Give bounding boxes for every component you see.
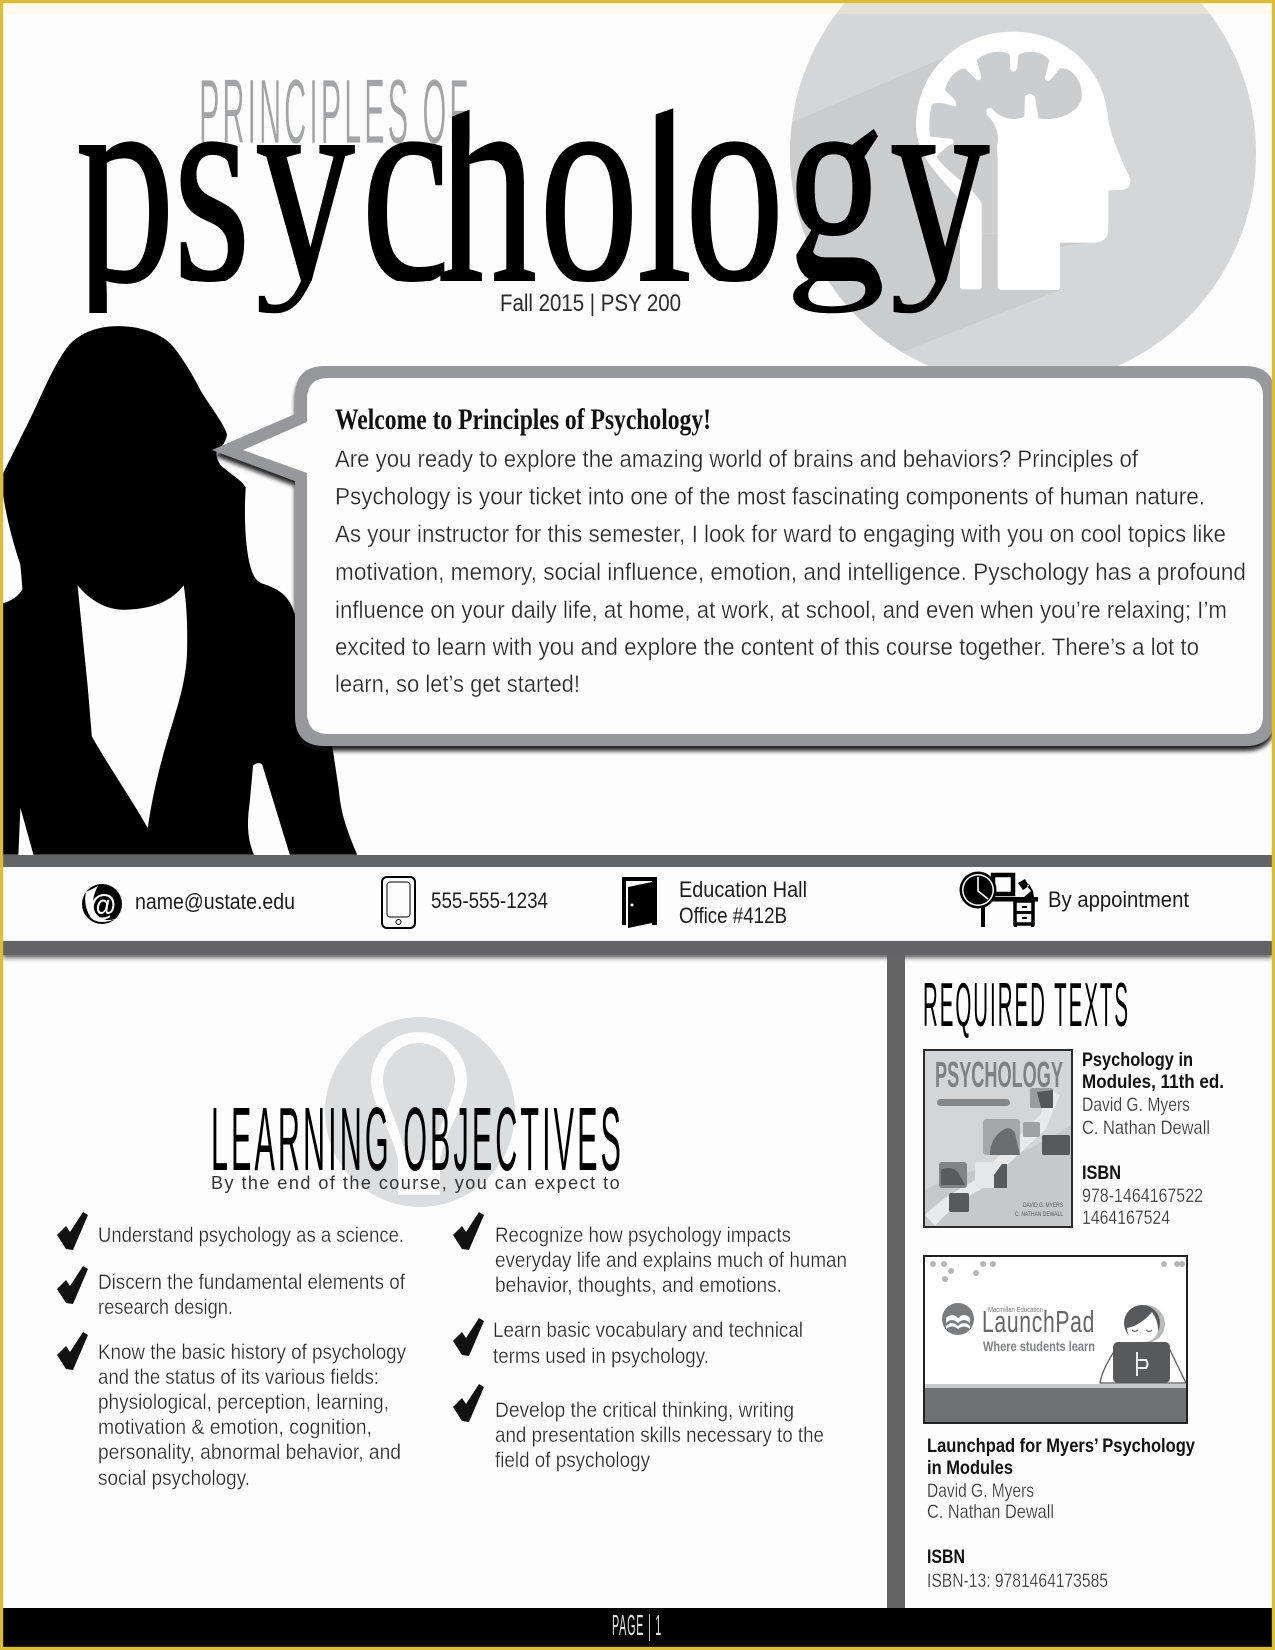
book details: 1464167524 bbox=[1082, 1207, 1170, 1229]
objective 6: Develop the critical thinking, writing bbox=[495, 1398, 794, 1422]
contact: office hours bbox=[960, 872, 1189, 927]
launchpad image: Macmillan Education bbox=[988, 1307, 1043, 1314]
icon: clock and desk bbox=[960, 872, 1038, 927]
objective 3 bbox=[57, 1332, 406, 1490]
contact: email bbox=[82, 884, 295, 924]
book cover: psychology in modules: DAVID G. MYERS bbox=[1023, 1203, 1063, 1209]
book cover: psychology in modules: C. NATHAN DEWALL bbox=[1015, 1212, 1064, 1218]
book details bbox=[1082, 1049, 1224, 1229]
launchpad details: David G. Myers bbox=[927, 1480, 1034, 1502]
subheading: By the end of the course, you can expect to bbox=[211, 1173, 622, 1193]
book details: C. Nathan Dewall bbox=[1082, 1117, 1210, 1139]
contact: office: Education Hall bbox=[679, 877, 807, 902]
contact: office: Office #412B bbox=[679, 903, 787, 928]
top tint strip bbox=[3, 3, 1272, 14]
objective 3: personality, abnormal behavior, and bbox=[98, 1440, 401, 1464]
objective 5: Learn basic vocabulary and technical bbox=[493, 1318, 803, 1342]
objective 4 bbox=[453, 1212, 847, 1297]
contact: email: name@ustate.edu bbox=[135, 889, 295, 914]
welcome body text: Psychology is your ticket into one of the most fascinating components of human nature. bbox=[335, 484, 1205, 510]
objective 3: social psychology. bbox=[98, 1466, 250, 1490]
objective 2: Discern the fundamental elements of bbox=[98, 1270, 405, 1294]
footer bar: PAGE | 1 bbox=[612, 1610, 662, 1642]
contact band bottom rule bbox=[3, 941, 1272, 955]
objective 6: field of psychology bbox=[495, 1448, 650, 1472]
objective 3: motivation & emotion, cognition, bbox=[98, 1415, 372, 1439]
launchpad image: Where students learn bbox=[983, 1338, 1095, 1354]
launchpad image bbox=[924, 1256, 1187, 1423]
objective 3: Know the basic history of psychology bbox=[98, 1340, 406, 1364]
icon: at sign: @ bbox=[90, 889, 116, 922]
launchpad details: ISBN-13: 9781464173585 bbox=[927, 1570, 1108, 1592]
footer bar bbox=[3, 1608, 1272, 1647]
contact: office hours: By appointment bbox=[1048, 887, 1189, 912]
text: PRINCIPLES OF bbox=[199, 61, 471, 163]
launchpad details: Launchpad for Myers’ Psychology bbox=[927, 1435, 1195, 1457]
objective 2 bbox=[57, 1266, 405, 1319]
icon: phone bbox=[382, 877, 415, 928]
objective 4: behavior, thoughts, and emotions. bbox=[495, 1273, 782, 1297]
contact: phone: 555-555-1234 bbox=[431, 888, 548, 913]
welcome body text bbox=[335, 446, 1246, 698]
launchpad details: in Modules bbox=[927, 1457, 1013, 1479]
book details: Psychology in bbox=[1082, 1049, 1193, 1071]
title: psychology: psychology bbox=[75, 146, 990, 313]
welcome body text: Are you ready to explore the amazing world of brains and behaviors? Principles of bbox=[335, 446, 1138, 473]
silhouette: instructor bbox=[2, 326, 357, 855]
panel: speech bubble bbox=[212, 366, 1275, 746]
welcome body text: learn, so let’s get started! bbox=[335, 671, 580, 698]
objective 4: Recognize how psychology impacts bbox=[495, 1223, 791, 1247]
objective 1 bbox=[57, 1212, 404, 1250]
book cover: psychology in modules bbox=[924, 1050, 1072, 1227]
panel: learning objectives bbox=[57, 1017, 847, 1490]
launchpad details bbox=[927, 1435, 1195, 1592]
objective 3: and the status of its various fields: bbox=[98, 1365, 379, 1389]
objective 2: research design. bbox=[98, 1295, 233, 1319]
book details: David G. Myers bbox=[1082, 1094, 1190, 1116]
icon: at sign bbox=[82, 884, 122, 924]
launchpad image: LaunchPad bbox=[982, 1304, 1095, 1339]
launchpad details: C. Nathan Dewall bbox=[927, 1501, 1054, 1523]
subtitle: term and course: Fall 2015 | PSY 200 bbox=[500, 290, 681, 317]
vertical divider bbox=[887, 955, 905, 1608]
icon: head and brain in circle bbox=[780, 0, 1256, 386]
objective 5: terms used in psychology. bbox=[493, 1344, 709, 1368]
welcome heading: Welcome to Principles of Psychology! bbox=[335, 403, 711, 436]
welcome body text: influence on your daily life, at home, at work, at school, and even when you’re relaxing; I’m bbox=[335, 597, 1227, 624]
launchpad details: ISBN bbox=[927, 1546, 965, 1568]
icon: door bbox=[622, 877, 657, 928]
welcome body text: motivation, memory, social influence, emotion, and intelligence. Pyschology has a profound bbox=[335, 559, 1246, 586]
welcome body text: As your instructor for this semester, I look for ward to engaging with you on cool topics like bbox=[335, 521, 1226, 548]
objective 1: Understand psychology as a science. bbox=[98, 1223, 404, 1247]
icon: light bulb bbox=[325, 1017, 515, 1207]
book details: ISBN bbox=[1082, 1162, 1121, 1184]
objective 6: and presentation skills necessary to the bbox=[495, 1423, 824, 1447]
contact band top rule bbox=[3, 855, 1272, 867]
panel: required texts bbox=[923, 971, 1224, 1592]
objective 5 bbox=[453, 1318, 803, 1368]
contact: office bbox=[622, 877, 807, 928]
objective 6 bbox=[453, 1384, 824, 1472]
book cover: psychology in modules: PSYCHOLOGY bbox=[935, 1054, 1063, 1095]
objective 3: physiological, perception, learning, bbox=[98, 1390, 389, 1414]
welcome body text: excited to learn with you and explore the content of this course together. There’s a lot to bbox=[335, 634, 1199, 661]
book details: Modules, 11th ed. bbox=[1082, 1071, 1224, 1093]
contact: phone bbox=[382, 877, 548, 928]
objective 4: everyday life and explains much of human bbox=[495, 1248, 847, 1272]
title: psychology: psychology bbox=[75, 21, 990, 344]
book details: 978-1464167522 bbox=[1082, 1185, 1203, 1207]
